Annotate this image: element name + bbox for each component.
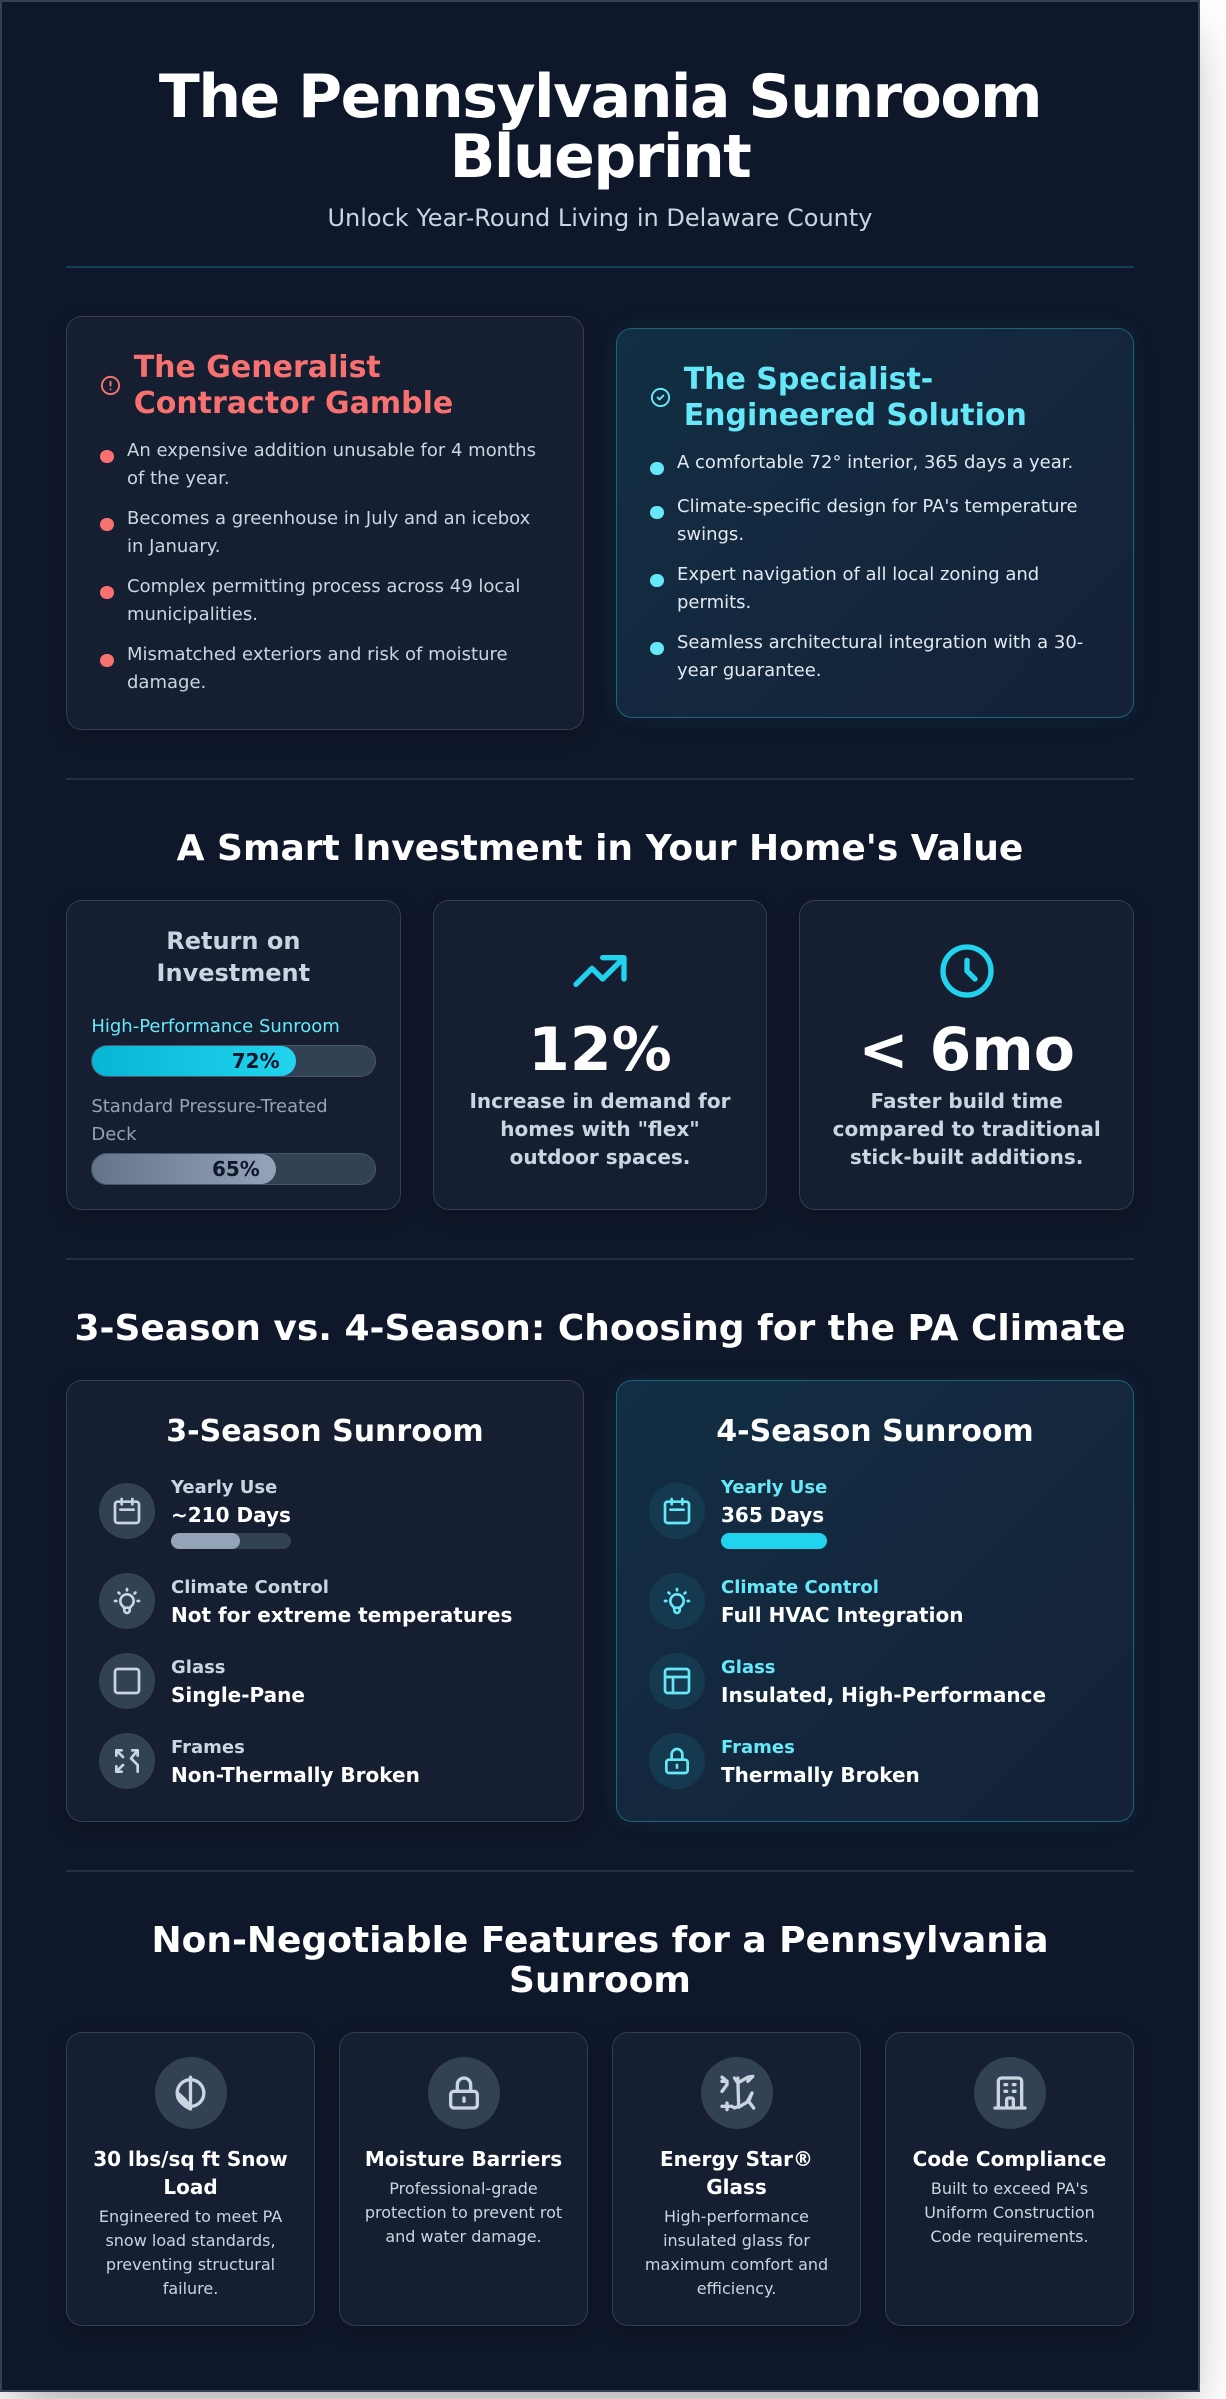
feature description: Uniform Construction	[924, 2203, 1095, 2222]
panel: the specialist-engineered solution: permits.	[677, 592, 751, 613]
panel title: 4-Season Sunroom	[716, 1414, 1034, 1449]
stat description: Faster build time	[871, 1089, 1063, 1113]
value: Insulated, High-Performance	[721, 1683, 1046, 1707]
stat description: outdoor spaces.	[510, 1145, 690, 1169]
feature description	[365, 2179, 562, 2246]
bullet item 2: Becomes a greenhouse in July and an icebox	[127, 508, 530, 529]
feature title: Energy Star®	[660, 2147, 813, 2171]
icon: broken arrows	[99, 1733, 155, 1789]
icon: single pane	[99, 1653, 155, 1709]
bullet item 4	[650, 632, 1083, 681]
panel: energy star glass	[612, 2032, 861, 2326]
label: standard deck: Standard Pressure-Treated	[91, 1096, 328, 1117]
bullet item 3: Complex permitting process across 49 local	[127, 576, 520, 597]
feature description: preventing structural	[106, 2255, 275, 2274]
icon: lock	[428, 2057, 500, 2129]
label: Yearly Use	[171, 1477, 277, 1498]
panel: demand stat	[433, 900, 767, 1210]
icon: light bulb	[99, 1573, 155, 1629]
heading: non-negotiable features	[151, 1920, 1048, 2001]
stat description: compared to traditional	[833, 1117, 1101, 1141]
label: high-performance sunroom: High-Performance Sunroom	[91, 1016, 340, 1037]
bullet item 2	[650, 496, 1078, 545]
usage bar	[171, 1533, 290, 1549]
feature description: protection to prevent rot	[365, 2203, 562, 2222]
panel: return on investment	[66, 900, 401, 1210]
feature description: insulated glass for	[663, 2231, 810, 2250]
feature description	[924, 2179, 1095, 2246]
panel: the generalist contractor gamble: damage.	[127, 672, 206, 693]
title: The Pennsylvania Sunroom	[159, 62, 1041, 132]
value: Single-Pane	[171, 1683, 305, 1707]
feature description: Engineered to meet PA	[99, 2207, 282, 2226]
row: frames	[649, 1733, 920, 1789]
row: yearly use	[649, 1477, 827, 1549]
panel: the generalist contractor gamble	[66, 316, 584, 730]
feature description: snow load standards,	[105, 2231, 276, 2250]
stat: 12%: 12%	[528, 1015, 672, 1085]
icon: insulated panes	[649, 1653, 705, 1709]
feature description: and water damage.	[385, 2227, 542, 2246]
bullet item 3	[100, 576, 520, 625]
stat description	[833, 1089, 1101, 1169]
feature description: Code requirements.	[930, 2227, 1089, 2246]
feature title: Moisture Barriers	[365, 2147, 562, 2171]
feature title: 30 lbs/sq ft Snow	[93, 2147, 288, 2171]
heading: generalist: Contractor Gamble	[134, 386, 453, 421]
bullet item 3: Expert navigation of all local zoning and	[677, 564, 1039, 585]
panel: build time stat	[799, 900, 1134, 1210]
feature title: Glass	[706, 2175, 767, 2199]
panel: code compliance	[885, 2032, 1134, 2326]
bullet item 1: An expensive addition unusable for 4 months	[127, 440, 536, 461]
value: Full HVAC Integration	[721, 1603, 963, 1627]
roi heading: Return on	[166, 927, 300, 955]
label: standard deck: Deck	[91, 1124, 137, 1145]
usage bar	[721, 1533, 826, 1549]
bar: sunroom 72%	[91, 1045, 376, 1077]
row: climate control	[99, 1573, 512, 1629]
value: 365 Days	[721, 1503, 824, 1527]
heading: specialist: Engineered Solution	[684, 398, 1027, 433]
heading: non-negotiable features: Sunroom	[509, 1960, 691, 2001]
label: Yearly Use	[721, 1477, 827, 1498]
stat description: stick-built additions.	[850, 1145, 1083, 1169]
feature description: failure.	[163, 2279, 218, 2298]
label: Glass	[171, 1657, 226, 1678]
value: Not for extreme temperatures	[171, 1603, 512, 1627]
icon: trending up	[573, 955, 627, 987]
feature description: maximum comfort and	[645, 2255, 828, 2274]
feature description	[99, 2207, 282, 2298]
feature title: Code Compliance	[913, 2147, 1106, 2171]
bullet item 4	[100, 644, 508, 693]
feature description	[645, 2207, 828, 2298]
bar: sunroom 72%: 72%	[232, 1049, 280, 1073]
stat: under 6 months: < 6mo	[858, 1015, 1075, 1085]
row: yearly use	[99, 1477, 291, 1549]
roi heading	[157, 927, 310, 987]
bullet item 4: Seamless architectural integration with a 30-	[677, 632, 1083, 653]
bar: deck 65%	[91, 1153, 376, 1185]
icon: calendar	[649, 1483, 705, 1539]
heading: specialist: The Specialist-	[684, 362, 933, 397]
icon: clock	[940, 944, 994, 998]
icon: warning circle	[100, 376, 120, 396]
label: Climate Control	[721, 1577, 879, 1598]
heading: season comparison: 3-Season vs. 4-Season: Choosing for the PA Climate	[74, 1308, 1126, 1349]
row: frames	[99, 1733, 420, 1789]
panel: 4-season sunroom	[616, 1380, 1134, 1822]
feature description: Built to exceed PA's	[931, 2179, 1088, 2198]
bullet item 1: A comfortable 72° interior, 365 days a year.	[677, 452, 1073, 473]
heading: specialist	[684, 362, 1027, 433]
heading: generalist: The Generalist	[134, 350, 381, 385]
bullet item 4: Mismatched exteriors and risk of moisture	[127, 644, 508, 665]
panel: the specialist-engineered solution: year guarantee.	[677, 660, 822, 681]
feature title: Load	[163, 2175, 218, 2199]
bullet item 2	[100, 508, 530, 557]
icon: energy star	[700, 2057, 772, 2129]
bullet item 1	[100, 440, 536, 489]
feature title	[660, 2147, 813, 2199]
stat description	[469, 1089, 730, 1169]
bar: deck 65%: 65%	[212, 1157, 260, 1181]
label: Frames	[171, 1737, 245, 1758]
heading: non-negotiable features: Non-Negotiable Features for a Pennsylvania	[151, 1920, 1048, 1961]
panel: snow load	[66, 2032, 315, 2326]
feature description: Professional-grade	[389, 2179, 538, 2198]
label: Climate Control	[171, 1577, 329, 1598]
label: standard deck	[91, 1096, 328, 1145]
icon: light bulb	[649, 1573, 705, 1629]
roi heading: Investment	[157, 959, 310, 987]
icon: calendar	[99, 1483, 155, 1539]
row: glass	[649, 1653, 1046, 1709]
feature description: High-performance	[664, 2207, 809, 2226]
label: Glass	[721, 1657, 776, 1678]
panel: the specialist-engineered solution	[616, 328, 1134, 718]
stat description: homes with "flex"	[500, 1117, 700, 1141]
feature title	[93, 2147, 288, 2199]
row: glass	[99, 1653, 305, 1709]
bullet item 2: Climate-specific design for PA's temperature	[677, 496, 1078, 517]
title	[159, 62, 1041, 192]
icon: lock	[649, 1733, 705, 1789]
panel: the generalist contractor gamble: of the year.	[127, 468, 230, 489]
stat description: Increase in demand for	[469, 1089, 730, 1113]
heading: smart investment: A Smart Investment in Your Home's Value	[177, 828, 1023, 869]
panel: 3-season sunroom	[66, 1380, 584, 1822]
row: climate control	[649, 1573, 963, 1629]
icon: snow load	[154, 2057, 226, 2129]
bullet item 3	[650, 564, 1039, 613]
heading: generalist	[134, 350, 453, 421]
panel title: 3-Season Sunroom	[166, 1414, 484, 1449]
subtitle: Unlock Year-Round Living in Delaware County	[327, 204, 872, 232]
title: Blueprint	[450, 122, 750, 192]
label: Frames	[721, 1737, 795, 1758]
panel: moisture barriers	[339, 2032, 588, 2326]
icon: building	[974, 2057, 1046, 2129]
panel: the generalist contractor gamble: municipalities.	[127, 604, 258, 625]
panel: the generalist contractor gamble: in January.	[127, 536, 221, 557]
value: Thermally Broken	[721, 1763, 920, 1787]
panel: the specialist-engineered solution: swings.	[677, 524, 744, 545]
icon: check circle	[650, 388, 670, 408]
feature description: efficiency.	[697, 2279, 776, 2298]
value: Non-Thermally Broken	[171, 1763, 420, 1787]
value: ~210 Days	[171, 1503, 291, 1527]
